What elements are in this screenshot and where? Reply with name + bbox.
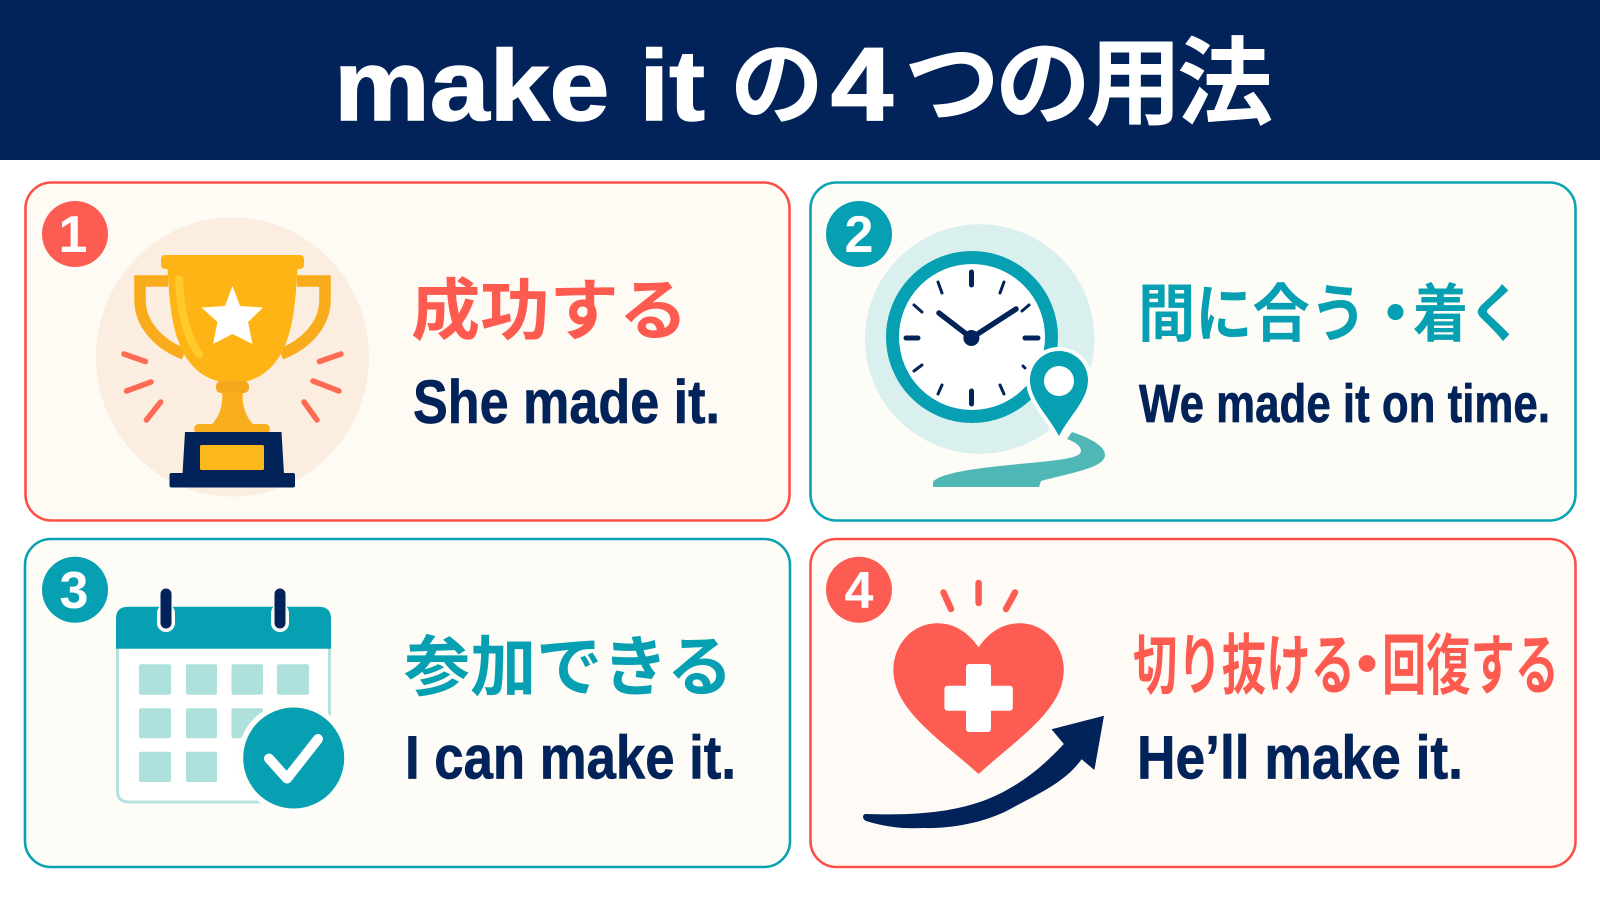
heading: 切り抜ける・回復する: 切り抜ける [1133,628,1355,702]
arrow: recovery [863,716,1104,828]
panel: 1 success [26,182,790,520]
heading: 参加できる: 参加できる [404,630,733,704]
icon: trophy [96,218,369,496]
heading: 間に合う・着く: 着く [1413,280,1523,350]
title: 用 [1086,31,1182,138]
heading: 間に合う・着く: 間に合う [1138,280,1367,350]
number badge 4: 4 [845,562,874,620]
number badge 1: 1 [59,206,87,264]
title: の [730,32,824,137]
panel: 4 pull through [810,539,1576,867]
example: She made it.: She made it. [413,368,720,436]
heading: 切り抜ける・回復する: ・ [1334,628,1400,702]
example: He'll make it.: He’ll make it. [1137,724,1463,792]
title: の [995,31,1091,138]
panel: 3 can attend [25,539,790,867]
number badge 4 [826,557,892,623]
title: 法 [1177,31,1273,138]
number badge 1 [42,201,108,267]
example: I can make it.: I can make it. [405,724,736,792]
number badge 3 [42,557,108,623]
number badge 2: 2 [845,206,873,264]
title: 4 [831,27,893,143]
number badge 3: 3 [60,562,88,620]
number badge 2 [826,201,892,267]
icon: calendar with check [116,594,350,814]
icon: heart with cross [893,583,1064,774]
header band [0,0,1600,160]
panel: 2 on time [810,182,1576,520]
title: make it [334,30,705,142]
heading: 間に合う・着く: ・ [1364,280,1427,350]
heading: 成功する: 成功する [411,274,688,349]
title: つ [904,31,1000,138]
icon: clock with pin and road [865,224,1105,487]
